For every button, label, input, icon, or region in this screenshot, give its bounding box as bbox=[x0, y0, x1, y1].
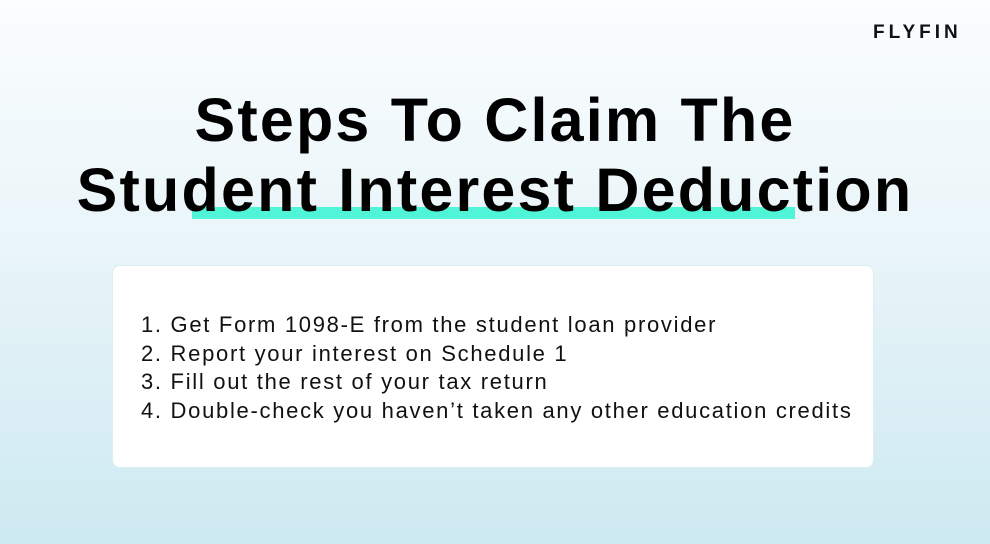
title: Student Interest Deduction bbox=[77, 156, 913, 224]
steps list: 2. Report your interest on Schedule 1 bbox=[141, 340, 568, 366]
title: Steps To Claim The bbox=[194, 86, 796, 154]
logo: FLYFIN bbox=[873, 22, 962, 43]
steps list: 1. Get Form 1098-E from the student loan provider bbox=[141, 312, 717, 337]
steps list: 3. Fill out the rest of your tax return bbox=[141, 369, 548, 394]
steps list: 4. Double-check you haven’t taken any other education credits bbox=[141, 398, 853, 422]
highlight underline bbox=[192, 207, 795, 219]
steps list bbox=[141, 312, 853, 422]
panel: steps card bbox=[112, 265, 874, 468]
title bbox=[77, 86, 913, 224]
